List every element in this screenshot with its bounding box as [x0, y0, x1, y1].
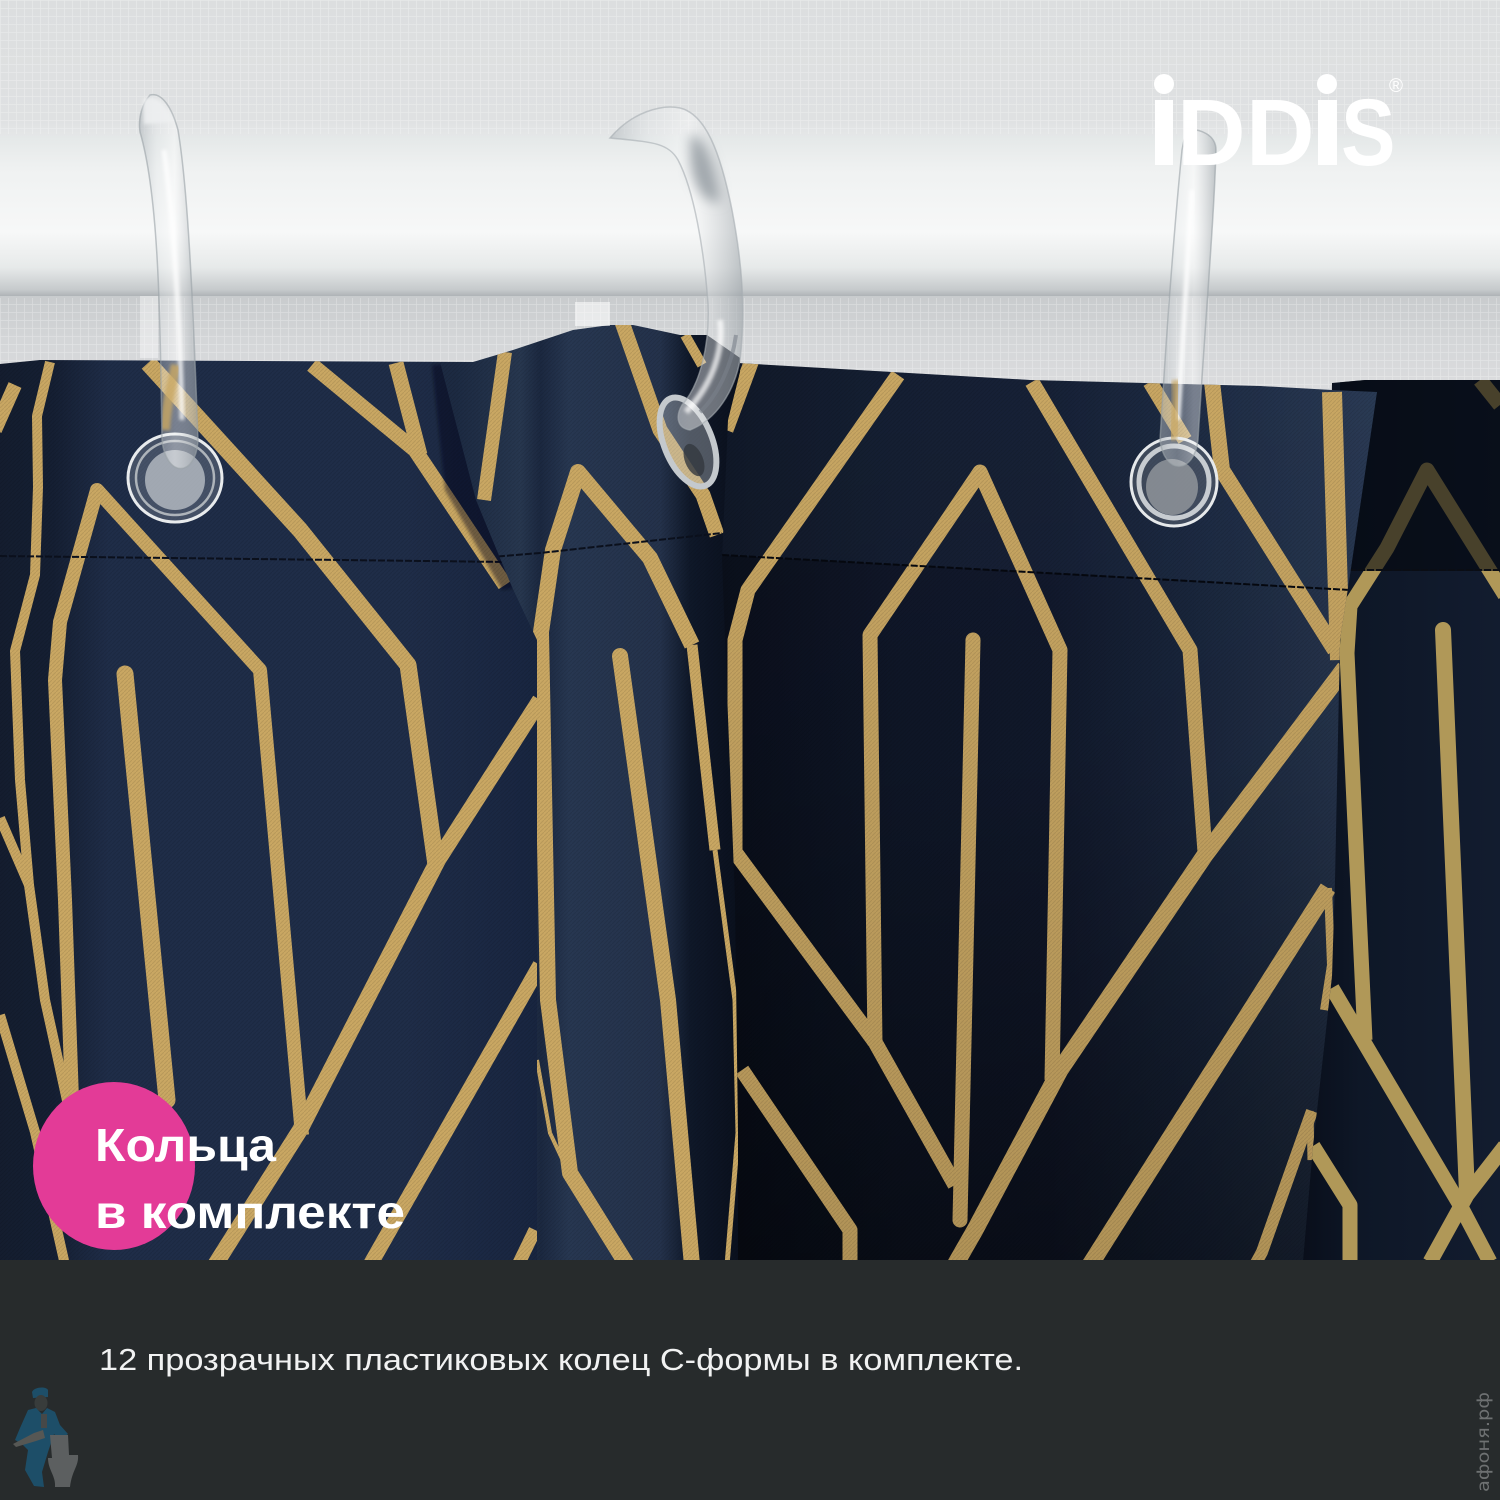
curtain panel: far right fold	[1290, 378, 1500, 1262]
ring 3 with grommet	[1131, 130, 1217, 526]
logo: IDDIS: D	[1177, 80, 1246, 186]
wall background	[0, 0, 1500, 395]
logo: IDDIS: D	[1246, 80, 1315, 186]
logo: IDDIS: ®	[1389, 76, 1403, 97]
curtain rod	[0, 136, 1500, 296]
logo: IDDIS	[1154, 74, 1403, 186]
ring 1 with grommet	[128, 95, 222, 522]
icon: plumber mascot with toilet	[13, 1388, 78, 1487]
logo: IDDIS: S	[1341, 79, 1395, 185]
badge heading second line: в комплекте	[95, 1186, 405, 1238]
ring 2 with grommet	[575, 107, 743, 495]
watermark: афоня.рф	[1474, 1392, 1494, 1492]
caption text: 12 прозрачных пластиковых колец С-формы в комплекте.	[99, 1342, 1023, 1377]
badge heading: Кольца	[95, 1119, 276, 1171]
pink badge circle	[33, 1082, 195, 1250]
curtain panel: centre fold	[440, 322, 740, 1265]
bottom caption panel	[0, 1260, 1500, 1500]
curtain panel: left fold	[0, 355, 545, 1265]
curtain panel: right-centre fold	[720, 360, 1380, 1265]
